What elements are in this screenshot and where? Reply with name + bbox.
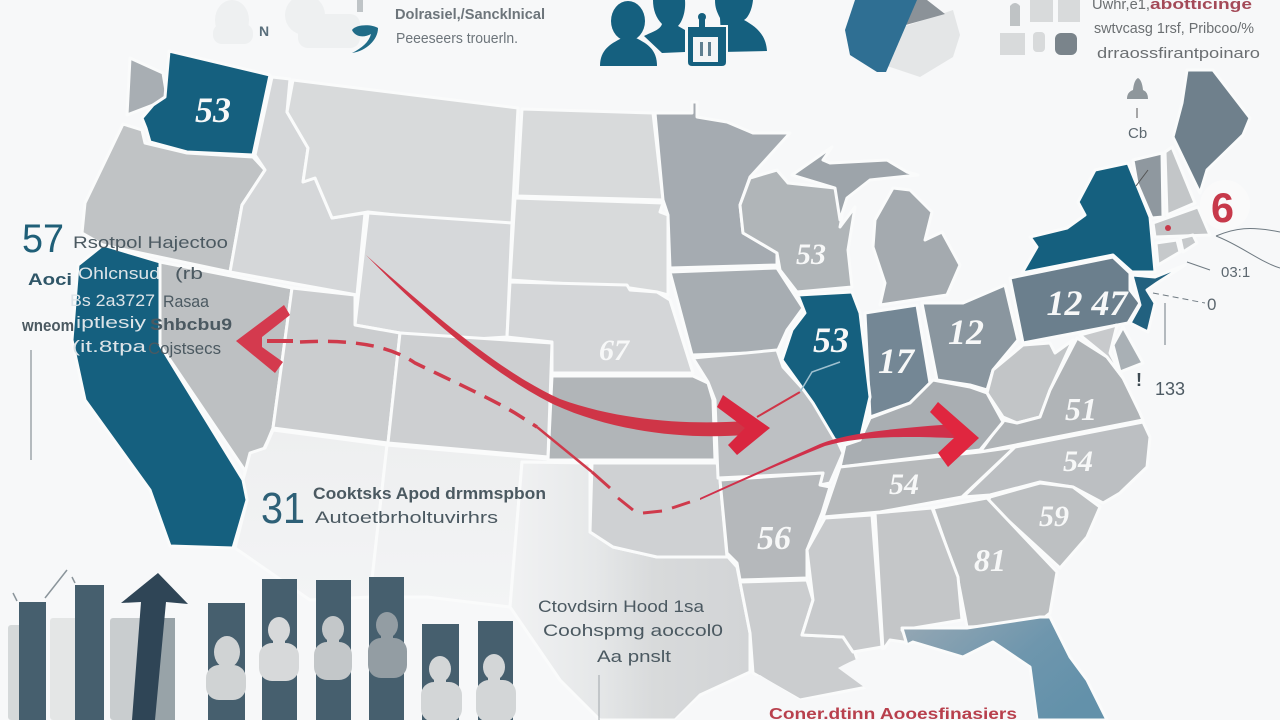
- top left text block: Peeeseers trouerln.: [396, 30, 518, 47]
- southeast states: [802, 325, 1150, 652]
- stat text: Rsotpol Hajectoo: [73, 233, 228, 252]
- number: Pennsylvania: 12 47: [1046, 283, 1130, 323]
- person right: [715, 0, 767, 52]
- arrow: solid red flow to Missouri: [366, 255, 840, 455]
- stat callout: 57: [21, 217, 232, 358]
- stat number: 31: [261, 484, 305, 533]
- background bars: [8, 618, 175, 720]
- small glyph: N: [259, 23, 269, 39]
- small line: [357, 0, 363, 12]
- top center people icon: [600, 0, 767, 67]
- stat callout: 57: Aoci: [28, 270, 72, 289]
- small mark: !: [1136, 370, 1142, 390]
- faint people icons top left: [213, 0, 378, 53]
- stat text: Cooktsks Apod drmmspbon: [313, 484, 546, 503]
- state: Washington highlighted: [142, 51, 270, 155]
- stat callout: 57: wneom: [21, 316, 74, 335]
- person middle: [644, 0, 685, 53]
- person: [476, 654, 516, 720]
- person: [259, 617, 299, 681]
- top right text block: swtvcasg 1rsf, Pribcoo/%: [1094, 20, 1254, 37]
- state: New Jersey and Long Island: [1130, 265, 1185, 332]
- person: [314, 616, 352, 680]
- top left text block: Dolrasiel,/Sancklnical: [395, 6, 545, 23]
- stat number: 57: [22, 217, 64, 261]
- stat callout: 57: Rasaa: [163, 292, 210, 311]
- clipboard: [687, 13, 727, 67]
- state: Illinois highlighted: [782, 292, 870, 440]
- number: Wisconsin: 53: [796, 238, 826, 271]
- small label: Cb: [1128, 125, 1147, 142]
- west region states: [82, 58, 750, 720]
- bar chart with arrow: [8, 570, 516, 720]
- top left text block: [395, 6, 545, 47]
- gulf coast cutout: [675, 644, 1037, 720]
- person icons on bars: [206, 612, 516, 720]
- state: New York highlighted: [1022, 163, 1155, 273]
- state numbers: [195, 90, 1130, 578]
- red stat: 6: [1200, 180, 1250, 231]
- top center map fragment: [845, 0, 960, 77]
- state: California highlighted: [72, 245, 247, 548]
- number: North Carolina: 54: [1063, 445, 1093, 478]
- northeast callout marks: [1127, 78, 1280, 399]
- arrow: dashed red flow to west: [236, 305, 690, 513]
- number: Tennessee: 54: [889, 468, 919, 501]
- arrow up: [121, 573, 188, 720]
- small icon: [1127, 78, 1148, 99]
- center bottom text block: Ctovdsirn Hood 1sa: [538, 597, 705, 616]
- small label: 133: [1155, 379, 1185, 399]
- stat callout: 57: Cojstsecs: [148, 339, 221, 358]
- stat callout: 57: iptlesiy: [76, 313, 147, 332]
- person left: [600, 1, 657, 66]
- red dot on Massachusetts: [1165, 225, 1171, 231]
- stat callout: 31: Autoetbrholtuvirhrs: [315, 508, 498, 527]
- person: [206, 636, 246, 700]
- great lakes states: [740, 147, 1018, 417]
- number: Nebraska: 67: [599, 334, 630, 367]
- number: Georgia: 81: [974, 542, 1006, 578]
- state: Florida: [902, 617, 1107, 720]
- small dark icon: [1055, 33, 1077, 55]
- person: [421, 656, 462, 720]
- state: Pennsylvania: [1010, 257, 1140, 343]
- stat callout: 57: Bs 2a3727: [70, 291, 155, 310]
- number: South Carolina: 59: [1039, 500, 1069, 533]
- red stat: 6: 6: [1211, 184, 1234, 231]
- top right squares icon: [1000, 0, 1080, 55]
- center text leader line: [598, 675, 600, 720]
- center bottom text block: Coohspmg aoccol0: [543, 621, 723, 640]
- stat callout: 57: (it.8tpa: [72, 337, 147, 356]
- trend marks: [13, 570, 75, 601]
- top right text block: drraossfirantpoinaro: [1097, 45, 1260, 62]
- stat callout: 57: (rb: [175, 264, 203, 283]
- number: Virginia: 51: [1065, 391, 1097, 427]
- bars: [19, 577, 513, 720]
- person: [368, 612, 407, 678]
- number: Indiana: 17: [878, 341, 916, 381]
- plains states: [507, 102, 867, 700]
- top right text block: [1092, 0, 1260, 62]
- stat callout: 31: [261, 484, 546, 533]
- stat callout: 57: Ohlcnsud: [78, 264, 160, 283]
- number: Illinois: 53: [813, 320, 849, 360]
- number: Arkansas: 56: [757, 520, 791, 557]
- callout leader line: [30, 350, 32, 460]
- small teal swoosh icon: [352, 25, 378, 53]
- center bottom text block: Aa pnslt: [597, 647, 671, 666]
- arrow: red flow to Kentucky: [700, 402, 979, 500]
- small label: 03:1: [1221, 264, 1250, 281]
- center bottom text block: [538, 597, 723, 666]
- number: Washington: 53: [195, 90, 231, 130]
- stat callout: 57: Shbcbu9: [150, 315, 232, 334]
- number: Ohio: 12: [948, 312, 984, 352]
- small label: 0: [1207, 295, 1216, 314]
- new england states: [1133, 70, 1250, 265]
